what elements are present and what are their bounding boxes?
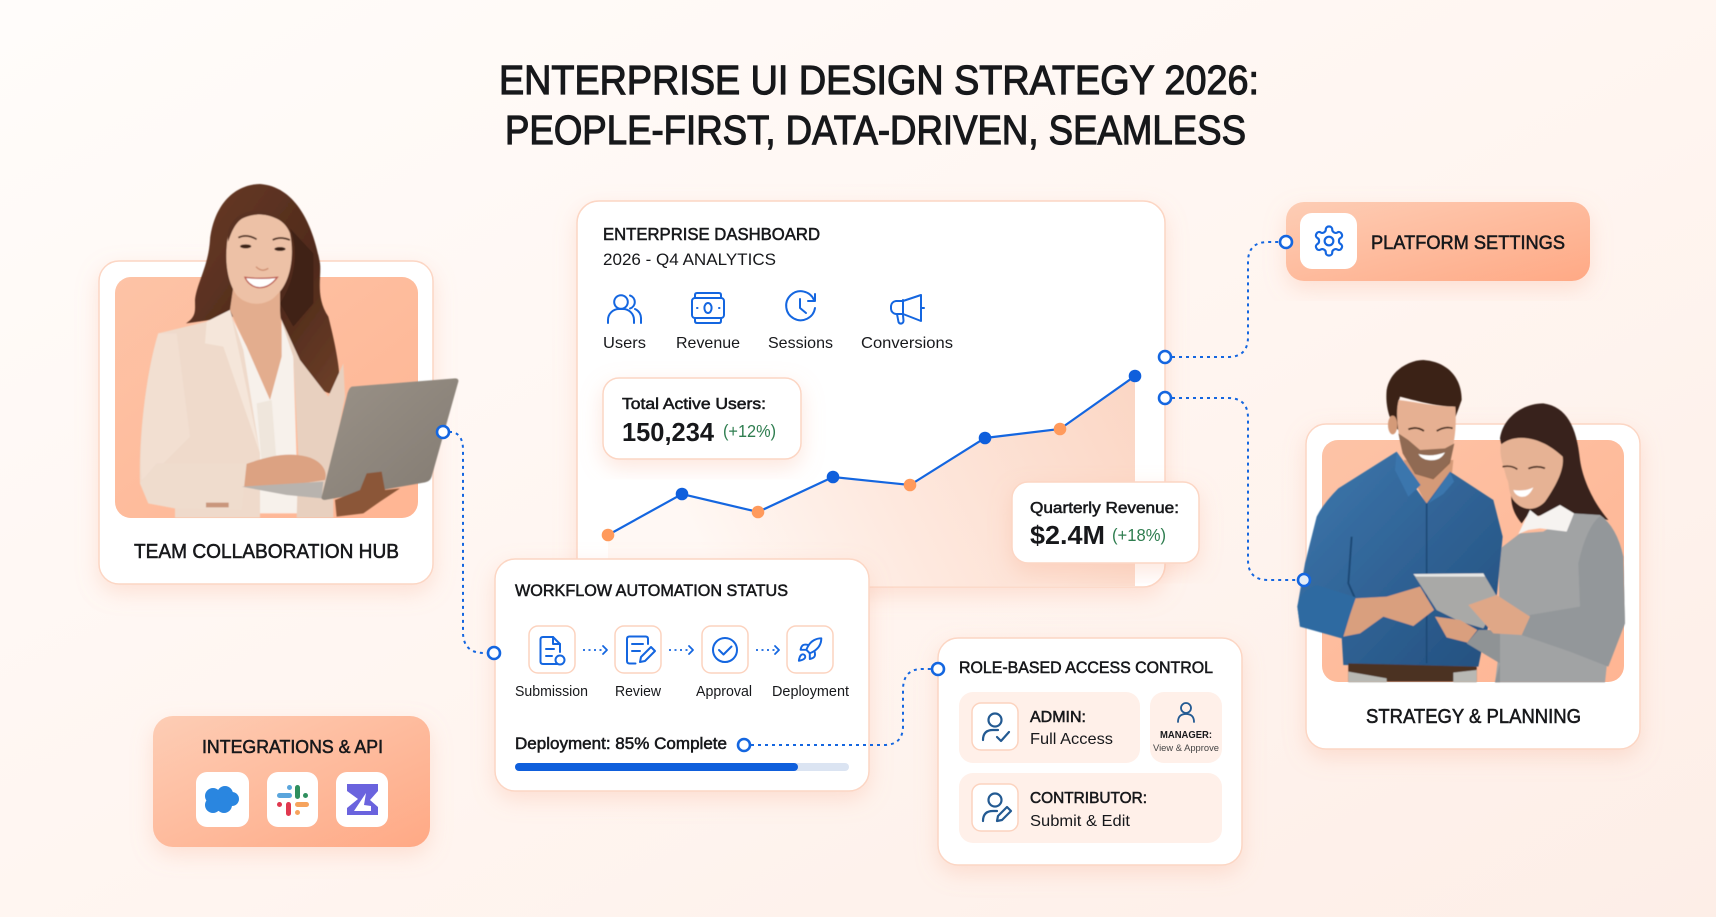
role: manager: MANAGER: xyxy=(1160,729,1212,741)
icon: cloud logo xyxy=(196,772,249,827)
illustration: two colleagues with tablet xyxy=(1297,360,1625,682)
metric: users: Users xyxy=(603,335,646,352)
panel: enterprise dashboard: 2026 - Q4 ANALYTICS xyxy=(603,250,776,269)
panel: team collaboration hub: TEAM COLLABORATION HUB xyxy=(134,540,399,563)
metric: users xyxy=(603,295,646,352)
panel: strategy and planning xyxy=(1297,360,1640,749)
metric: revenue xyxy=(676,293,740,352)
metric: sessions xyxy=(768,291,833,352)
icon: gear xyxy=(1300,213,1357,269)
role: contributor xyxy=(959,773,1222,843)
arrow xyxy=(756,646,779,654)
progress bar xyxy=(515,763,849,771)
panel: integrations and api: INTEGRATIONS & API xyxy=(202,736,383,757)
step: deployment xyxy=(772,626,849,700)
title: PEOPLE-FIRST, DATA-DRIVEN, SEAMLESS xyxy=(505,107,1246,153)
metric: conversions xyxy=(861,295,953,352)
stat card: quarterly revenue: Quarterly Revenue: xyxy=(1030,500,1179,517)
stat card: total active users: 150,234 xyxy=(622,417,715,447)
stat card: total active users: Total Active Users: xyxy=(622,396,766,413)
icon: slack logo xyxy=(267,772,318,827)
connector: dashboard to strategy and planning xyxy=(1172,398,1298,580)
progress label: Deployment: 85% Complete xyxy=(515,734,727,753)
connector: hub to workflow xyxy=(449,432,488,653)
role: contributor: CONTRIBUTOR: xyxy=(1030,790,1147,807)
stat card: quarterly revenue: (+18%) xyxy=(1112,525,1166,545)
arrow xyxy=(669,646,693,654)
panel: enterprise dashboard xyxy=(577,201,1165,587)
panel: platform settings xyxy=(1286,202,1590,281)
step: review: Review xyxy=(615,684,662,700)
panel: role-based access control xyxy=(938,638,1242,865)
panel: team collaboration hub xyxy=(99,184,458,584)
step: submission xyxy=(515,626,588,700)
illustration: woman with laptop xyxy=(140,184,458,518)
panel: role-based access control: ROLE-BASED ACCESS CONTROL xyxy=(959,658,1213,677)
role: admin: Full Access xyxy=(1030,731,1113,748)
role: admin: ADMIN: xyxy=(1030,709,1086,726)
panel: strategy and planning: STRATEGY & PLANNING xyxy=(1366,706,1581,728)
stat card: total active users xyxy=(603,378,801,459)
role: contributor: Submit & Edit xyxy=(1030,813,1131,830)
metric: revenue: Revenue xyxy=(676,335,740,352)
role: manager xyxy=(1150,692,1222,763)
panel: workflow automation status xyxy=(495,559,869,791)
connector nodes xyxy=(437,236,1310,751)
panel: enterprise dashboard: ENTERPRISE DASHBOARD xyxy=(603,224,820,244)
stat card: quarterly revenue xyxy=(1012,482,1199,563)
role: manager: View & Approve xyxy=(1153,743,1219,754)
role: admin xyxy=(959,692,1140,763)
step: approval xyxy=(696,626,752,700)
metric: sessions: Sessions xyxy=(768,335,833,352)
step: approval: Approval xyxy=(696,684,752,700)
title xyxy=(499,57,1259,153)
connector: progress to access control xyxy=(751,669,932,745)
connector: dashboard to platform settings xyxy=(1172,242,1280,357)
step: submission: Submission xyxy=(515,684,588,700)
title: ENTERPRISE UI DESIGN STRATEGY 2026: xyxy=(499,57,1259,103)
stat card: total active users: (+12%) xyxy=(723,421,776,441)
panel: workflow automation status: WORKFLOW AUTOMATION STATUS xyxy=(515,581,788,600)
panel: integrations and api xyxy=(153,716,430,847)
step: review xyxy=(615,626,662,700)
panel: platform settings: PLATFORM SETTINGS xyxy=(1371,232,1565,254)
icon: purple z logo xyxy=(336,772,388,827)
step: deployment: Deployment xyxy=(772,684,849,700)
arrow xyxy=(583,646,607,654)
stat card: quarterly revenue: $2.4M xyxy=(1030,520,1105,550)
metric: conversions: Conversions xyxy=(861,335,953,352)
line chart xyxy=(602,370,1141,586)
